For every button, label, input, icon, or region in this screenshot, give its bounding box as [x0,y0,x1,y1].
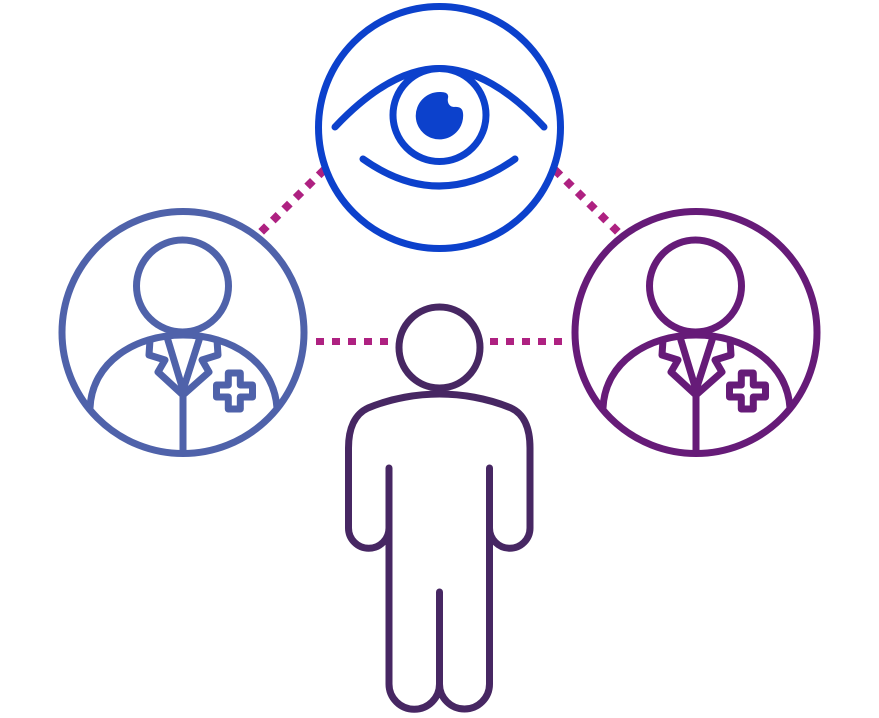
icon: patient figure [348,307,530,709]
connector: patient to right clinician [490,338,562,345]
connector: eye to left clinician [258,167,327,235]
icon: eye in circle [318,6,560,248]
icon: left clinician in circle [62,212,304,454]
connector: eye to right clinician [552,167,621,235]
icon: medical cross, right [730,373,766,409]
icon: right clinician in circle [575,212,817,454]
connector: left clinician to patient [316,338,388,345]
icon: medical cross, left [216,373,252,409]
